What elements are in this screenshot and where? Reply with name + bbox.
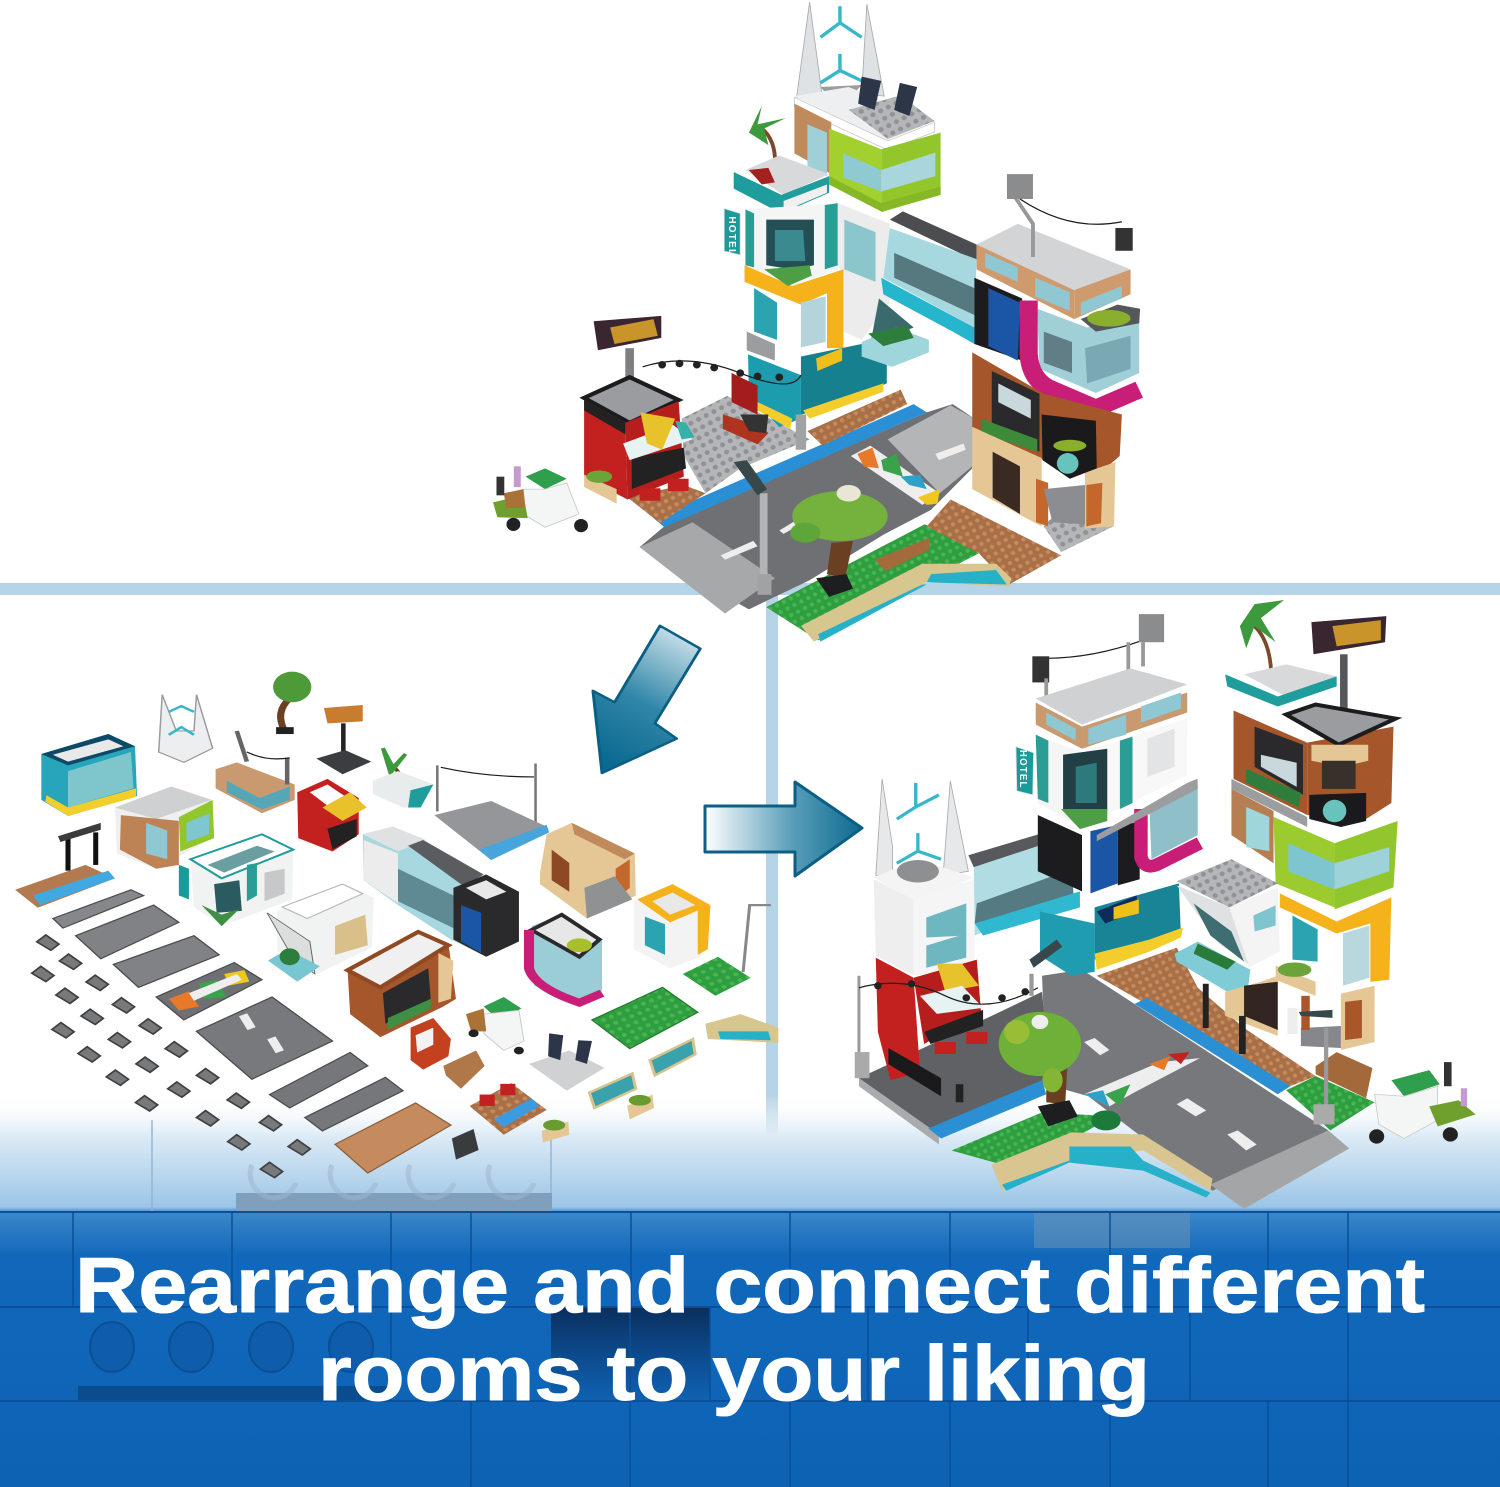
palm terrace (373, 748, 434, 808)
ghost brick above wall (152, 1120, 552, 1212)
headline (75, 1241, 1425, 1417)
loose tiles (32, 935, 310, 1178)
palm on terrace (749, 106, 786, 170)
green and white room (115, 786, 214, 869)
glass planter (862, 298, 929, 367)
lamp plate (683, 905, 771, 996)
glass bridge (881, 211, 977, 344)
hotel sign: HOTEL (726, 216, 737, 256)
rebuilt base plates (859, 948, 1375, 1209)
stand and bench (411, 1018, 485, 1089)
bridge section (363, 827, 519, 957)
tan arch room (540, 823, 636, 919)
roof terrace (216, 731, 295, 813)
small wall pieces and planters (452, 1014, 778, 1160)
vertical divider band (766, 595, 778, 1220)
rebuilt lamps and lights (855, 940, 1335, 1124)
bottom fade to blue (0, 1095, 1500, 1213)
rebuilt glass bridge (968, 827, 1080, 936)
small kiosk (297, 779, 367, 852)
base plates and roads (627, 390, 1113, 642)
arrow: assembled to disassembled (593, 626, 700, 773)
bus stop plate (15, 823, 115, 908)
hotel room (179, 834, 293, 926)
tuk tuk (493, 466, 588, 532)
green plate (592, 987, 698, 1049)
hotel sign (724, 208, 740, 256)
small tree (273, 672, 311, 734)
yellow room (634, 884, 710, 968)
teal shop (41, 734, 137, 816)
blue brick wall (0, 1212, 1500, 1487)
road plates (53, 890, 451, 1173)
model: assembled top view (493, 2, 1140, 642)
bench (875, 538, 930, 571)
headline: rooms to your liking (318, 1329, 1150, 1417)
rebuilt center tower (1016, 614, 1200, 976)
light plate (434, 764, 549, 860)
roof spires (159, 695, 213, 762)
slanted white room (267, 884, 374, 982)
small tuk tuk (466, 997, 524, 1054)
headline: Rearrange and connect different (75, 1241, 1425, 1329)
exploded parts (15, 672, 778, 1178)
model: rebuilt right view (855, 600, 1476, 1209)
left tower (724, 2, 941, 429)
street lamp (734, 414, 806, 595)
brick room (348, 932, 456, 1037)
rebuilt hotel sign (1016, 747, 1034, 795)
magenta glass room (529, 915, 602, 1007)
horizontal divider band (0, 583, 1500, 595)
rebuilt hotel sign: HOTEL (1017, 750, 1028, 789)
tree (790, 485, 888, 597)
solar plate (529, 1033, 605, 1091)
stool plate (470, 1083, 547, 1135)
string of lights (643, 360, 801, 384)
arrow: disassembled to rebuilt (705, 782, 862, 876)
rebuilt tuk tuk (1369, 1062, 1476, 1144)
small billboard (316, 705, 371, 774)
rebuilt left tower (874, 779, 987, 1096)
right building (972, 174, 1140, 528)
green room (829, 128, 941, 212)
rebuilt tree (999, 1012, 1121, 1130)
food stand (723, 373, 768, 444)
pizza kiosk (584, 316, 695, 504)
studs (90, 1322, 373, 1372)
rebuilt right building (1175, 600, 1398, 1098)
